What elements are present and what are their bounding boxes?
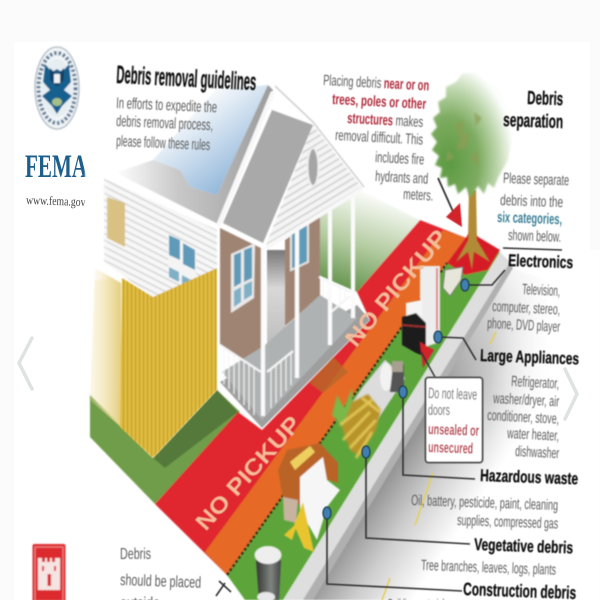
no pickup label: lower: NO PICKUP [190,411,306,535]
warning text: placing debris: hydrants and [375,168,429,188]
callout leader lines [323,270,505,591]
text: debris placement [120,546,201,600]
illustration: house [85,85,370,458]
icon: left carousel chevron [19,338,32,389]
street and curb [283,250,600,600]
washer [406,300,422,320]
no pickup strip [155,220,497,575]
intro text: In efforts to expedite the [116,95,217,116]
trash can [254,546,282,600]
orange strip [205,230,490,575]
gable roof [223,110,313,243]
porch base [220,305,370,428]
category: construction debris [388,579,576,600]
FEMA wordmark: FEMA [25,147,87,184]
callout: do not leave doors: unsealed or [428,421,480,440]
category: electronics [487,251,573,336]
text: debris placement: Debris [120,546,151,563]
category: large appliances [480,346,579,462]
website address: www.fema.gov [26,194,86,209]
fence shadow [153,390,238,468]
debris: construction [278,443,340,552]
category: electronics: Electronics [508,251,573,272]
tan panel [107,197,125,247]
leader: electronics [461,270,505,291]
upper window [291,224,308,270]
category: electronics: Television, [522,281,561,300]
warning text: placing debris: structures makes [347,110,424,131]
separation instructions [497,170,569,246]
leader: hazardous waste [399,386,475,479]
brick wall [220,228,265,374]
text: Debris removal guidelines [116,61,257,96]
arrow: to tree [438,178,462,227]
debris: vegetative [332,388,381,458]
gable siding [266,125,362,245]
heading: debris separation: Debris [527,88,564,110]
category: vegetative debris [421,535,573,579]
porch posts [263,193,353,416]
tree crown [431,72,514,198]
callout: do not leave doors: unsecured [428,439,473,458]
rear roof [115,85,273,224]
tree ring [447,232,500,275]
text: debris placement: should be placed [120,572,201,592]
gable trim [218,92,362,248]
leader: construction debris [323,507,462,591]
separation instructions: shown below. [508,227,561,246]
illustration: yard [90,192,500,600]
hazardous pad [342,360,405,428]
lawn behind the porch [318,192,420,292]
tree trunk [456,190,490,270]
icon: DHS seal [35,47,79,129]
FEMA logo block [25,47,87,209]
icon: right carousel chevron [565,369,577,419]
warning text: placing debris [323,72,434,205]
intro text: please follow these rules [116,133,211,154]
icon: army corps castle logo [32,544,66,600]
door [267,250,285,346]
red arrow [420,342,434,368]
porch floor [222,295,357,420]
warning text: placing debris: includes fire [375,149,425,169]
solar panel [153,85,268,195]
category: large appliances: water heater, [506,425,560,445]
callout: do not leave doors: doors [428,402,450,419]
callout: do not leave doors: Do not leave [428,385,477,404]
debris: electronics and appliances [402,266,463,368]
category: hazardous waste [411,466,578,533]
icon: gable vent [308,148,318,186]
heading: debris separation [503,88,564,133]
separation instructions: six categories, [497,209,562,228]
warning text: placing debris: meters. [403,186,434,205]
category: large appliances: dishwasher [515,443,560,462]
heading: debris separation: separation [503,110,564,133]
intro text: debris removal process, [116,113,213,134]
fence [90,268,217,458]
dotted line [227,263,447,575]
curbside lawn [227,252,500,600]
category: large appliances: Refrigerator, [511,373,560,393]
lawn left of the house [90,390,240,504]
callout: do not leave doors [421,352,482,462]
front window [231,243,255,313]
illustration: tree [431,72,514,270]
leader: large appliances [434,331,476,360]
debris: hazardous waste [380,361,404,392]
black stove [402,313,426,357]
side window [168,234,196,288]
warning text: placing debris: trees, poles or other [332,91,427,113]
leader: vegetative debris [362,446,470,544]
no pickup label: upper: NO PICKUP [340,224,452,352]
warning text: placing debris: Placing debris near or on [323,72,430,95]
porch railings [220,277,350,415]
bracket marker [216,581,231,596]
left fade to white [85,160,110,280]
stray yellow streaks [382,332,496,600]
refrigerator [420,266,440,346]
intro text [116,95,217,154]
lawn mower [443,267,463,296]
warning text: placing debris: removal difficult. This [335,127,424,149]
separation instructions: debris into the [500,192,563,211]
side siding [104,178,217,297]
